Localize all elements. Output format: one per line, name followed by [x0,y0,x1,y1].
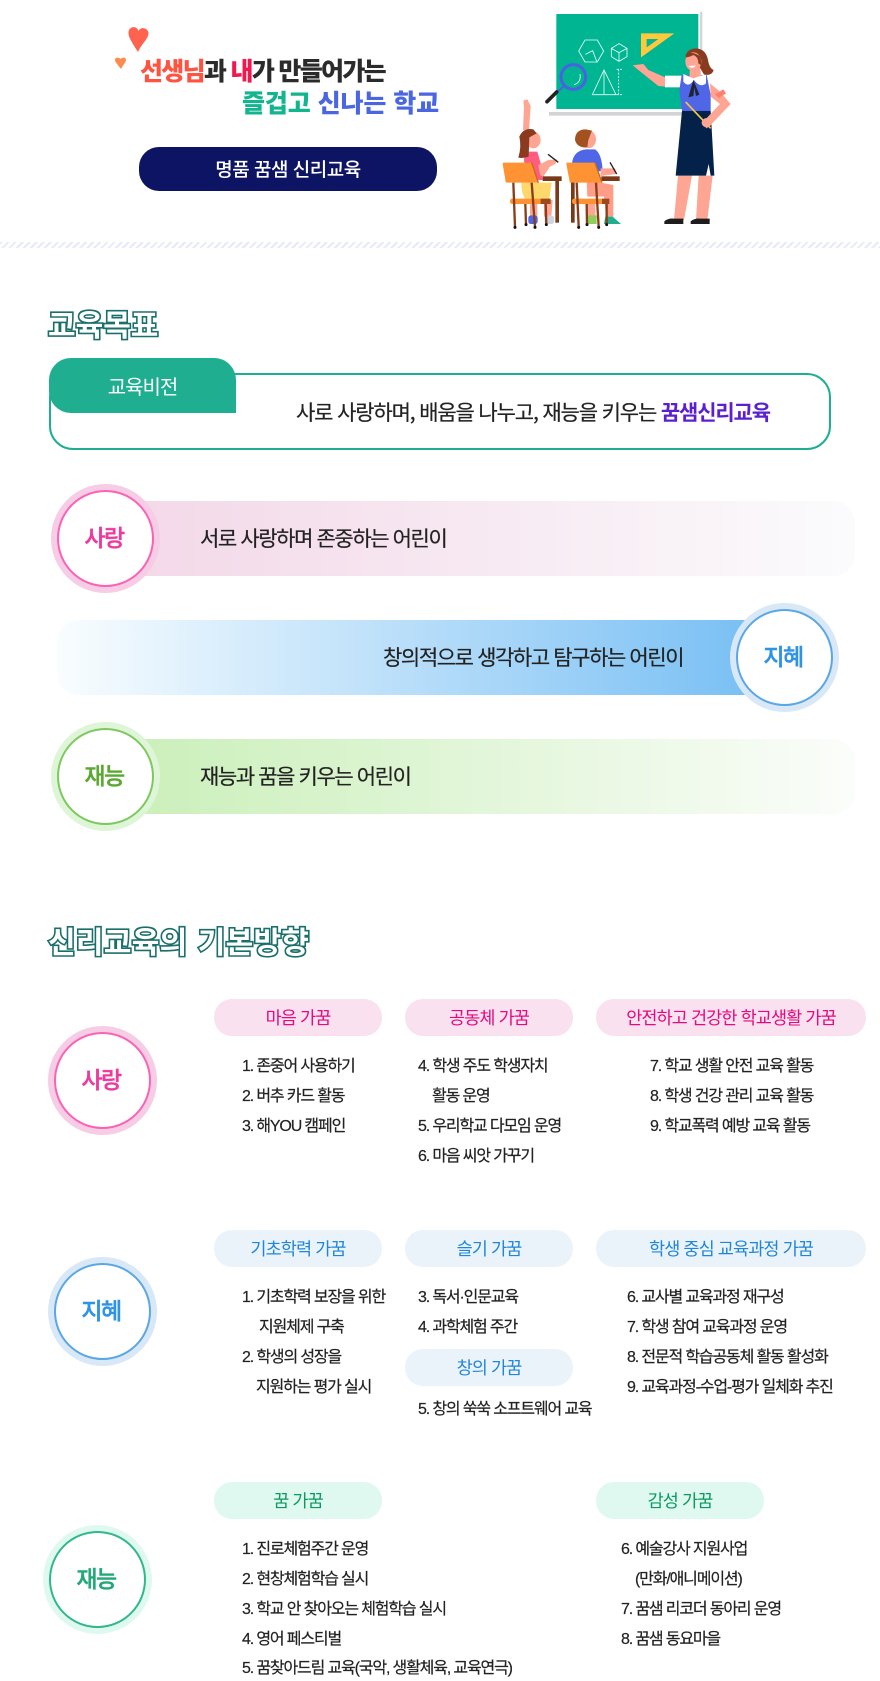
badge [51,722,160,831]
icon: hearts [115,27,148,69]
badge: 재능 [43,1525,152,1634]
heading: 신리교육의 기본방향: 신리교육의 기본방향 [48,918,309,962]
tag: 꿈 가꿈 [214,1482,382,1519]
list: 꿈 가꿈: 2. 현창체험학습 실시 [242,1570,368,1588]
badge: 지혜 [763,638,803,672]
list: 교육과정 가꿈: 9. 교육과정-수업-평가 일체화 추진 [627,1379,833,1396]
tag: 마음 가꿈: 마음 가꿈 [266,1005,330,1030]
panel: 재능 goal [51,722,820,831]
tag: 슬기 가꿈: 슬기 가꿈 [457,1236,521,1261]
student: girl [504,99,562,227]
title line 2: 즐겁고 신나는 학교 [242,84,439,120]
bar [105,739,855,814]
bar [105,501,855,576]
badge: school name pill [139,147,437,191]
badge: school name pill: 명품 꿈샘 신리교육 [215,155,361,182]
list: 학교생활 가꿈: 8. 학생 건강 관리 교육 활동 [650,1088,813,1104]
badge: 재능: 재능 [76,1560,116,1594]
list: 교육과정 가꿈: 6. 교사별 교육과정 재구성 [627,1289,784,1306]
student: boy [567,129,621,227]
illustration: teacher and students at blackboard [502,12,730,229]
goal text: 재능과 꿈을 키우는 어린이 [200,761,411,791]
tag: 공동체 가꿈 [405,999,573,1036]
tag: 감성 가꿈 [596,1482,764,1519]
list: 꿈 가꿈: 3. 학교 안 찾아오는 체험학습 실시 [242,1600,446,1618]
badge: 지혜 [48,1257,157,1366]
tag: 감성 가꿈: 감성 가꿈 [648,1488,712,1513]
list: 마음 가꿈: 3. 해YOU 캠페인 [242,1118,345,1134]
vision box outline [49,373,831,450]
badge: 사랑: 사랑 [81,1061,121,1095]
list: 슬기 가꿈 [418,1288,518,1336]
badge: 재능 [84,757,124,791]
list: 교육과정 가꿈 [627,1288,833,1396]
badge [730,603,839,712]
tag: 기초학력 가꿈 [214,1230,382,1267]
heading: 교육목표: 교육목표 [48,301,158,345]
tag: 공동체 가꿈: 공동체 가꿈 [449,1005,529,1030]
list: 슬기 가꿈: 3. 독서·인문교육 [418,1289,518,1306]
badge: 지혜: 지혜 [81,1292,121,1326]
list: 슬기 가꿈: 4. 과학체험 주간 [418,1319,517,1336]
list: 창의 가꿈: 5. 창의 쑥쑥 소프트웨어 교육 [418,1401,592,1418]
list: 마음 가꿈: 1. 존중어 사용하기 [242,1058,355,1074]
tag: 기초학력 가꿈: 기초학력 가꿈 [250,1236,346,1261]
vision text: 사로 사랑하며, 배움을 나누고, 재능을 키우는 꿈샘신리교육 [296,397,770,427]
list: 감성 가꿈: 7. 꿈샘 리코더 동아리 운영 [621,1600,781,1618]
list: 꿈 가꿈: 4. 영어 페스티벌 [242,1630,341,1648]
list: 학교생활 가꿈: 9. 학교폭력 예방 교육 활동 [650,1118,810,1134]
tag: 창의 가꿈: 창의 가꿈 [457,1355,521,1380]
list: 기초학력 가꿈 [242,1288,386,1396]
list: 기초학력 가꿈: 지원하는 평가 실시 [256,1379,371,1396]
panel: vision [49,358,831,450]
list: 감성 가꿈 [621,1540,781,1648]
badge [51,484,160,593]
list: 기초학력 가꿈: 1. 기초학력 보장을 위한 [242,1289,385,1306]
tag: 창의 가꿈 [405,1349,573,1386]
list: 공동체 가꿈: 4. 학생 주도 학생자치 [418,1058,548,1074]
vision tab [49,358,236,413]
list: 공동체 가꿈: 활동 운영 [432,1088,490,1104]
list: 학교생활 가꿈: 7. 학교 생활 안전 교육 활동 [650,1058,813,1074]
list: 감성 가꿈: 8. 꿈샘 동요마을 [621,1630,720,1648]
list: 학교생활 가꿈 [650,1057,814,1134]
tag: 슬기 가꿈 [405,1230,573,1267]
tag: 마음 가꿈 [214,999,382,1036]
badge: 사랑 [84,519,124,553]
list: 기초학력 가꿈: 2. 학생의 성장을 [242,1349,341,1366]
list: 기초학력 가꿈: 지원체제 구축 [259,1319,344,1336]
list: 마음 가꿈 [242,1058,355,1134]
panel: 사랑 goal [51,484,770,593]
goal text: 서로 사랑하며 존중하는 어린이 [200,523,446,553]
tag: 안전하고 건강한 학교생활 가꿈: 안전하고 건강한 학교생활 가꿈 [626,1005,836,1030]
header title [115,27,439,120]
list: 공동체 가꿈 [418,1058,561,1164]
panel: 지혜 goal [68,603,839,712]
list: 감성 가꿈: (만화/애니메이션) [635,1570,742,1588]
list: 교육과정 가꿈: 7. 학생 참여 교육과정 운영 [627,1319,787,1336]
list: 교육과정 가꿈: 8. 전문적 학습공동체 활동 활성화 [627,1349,828,1366]
badge: 사랑 [48,1026,157,1135]
list: 꿈 가꿈: 5. 꿈찾아드림 교육(국악, 생활체육, 교육연극) [242,1660,512,1676]
list: 공동체 가꿈: 6. 마음 씨앗 가꾸기 [418,1148,534,1164]
bar [57,620,757,695]
tag: 안전하고 건강한 학교생활 가꿈 [596,999,866,1036]
goal text: 창의적으로 생각하고 탐구하는 어린이 [383,642,683,672]
list: 마음 가꿈: 2. 버추 카드 활동 [242,1088,344,1104]
tag: 학생 중심 교육과정 가꿈: 학생 중심 교육과정 가꿈 [649,1236,813,1261]
list: 꿈 가꿈 [242,1540,512,1677]
tag: 학생 중심 교육과정 가꿈 [596,1230,866,1267]
tag: 꿈 가꿈: 꿈 가꿈 [273,1488,323,1513]
list: 꿈 가꿈: 1. 진로체험주간 운영 [242,1540,368,1558]
title line 1: 선생님과 내가 만들어가는 [140,52,385,88]
vision tab: 교육비전 [108,371,177,400]
list: 감성 가꿈: 6. 예술강사 지원사업 [621,1540,747,1558]
teacher [633,48,731,224]
list: 공동체 가꿈: 5. 우리학교 다모임 운영 [418,1118,561,1134]
